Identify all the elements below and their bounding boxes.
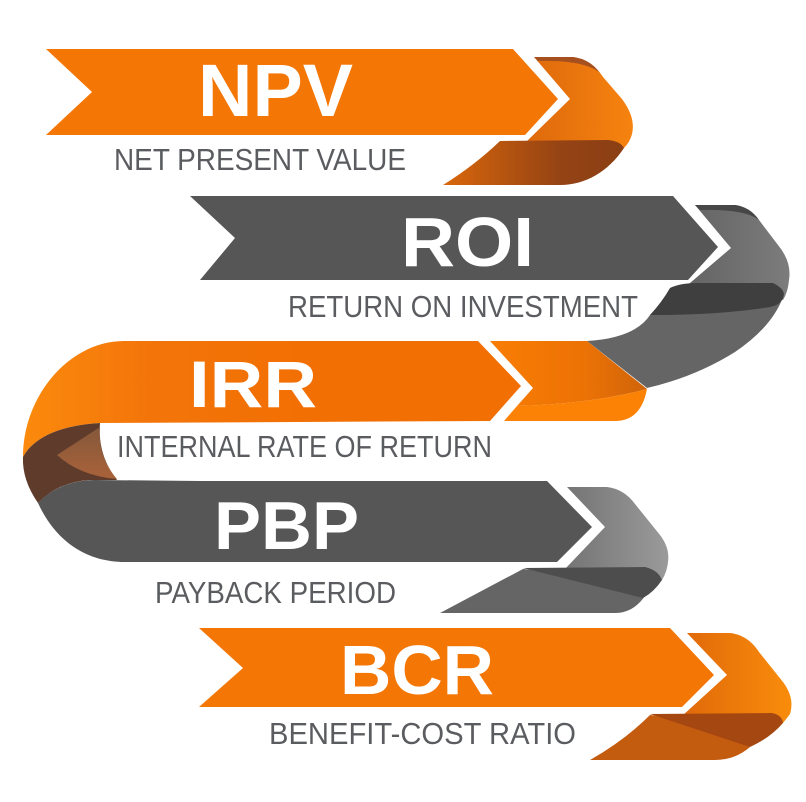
ribbon fold: ROI back bbox=[670, 205, 790, 300]
heading: BCR: BCR bbox=[340, 631, 494, 709]
label: benefit-cost ratio: BENEFIT-COST RATIO bbox=[269, 716, 576, 751]
arrow: NPV bbox=[46, 49, 558, 135]
ribbon fold: NPV top edge bbox=[534, 57, 600, 73]
ribbon fold: BCR lower bbox=[590, 715, 750, 760]
ribbon fold: IRR lower light bbox=[504, 389, 647, 421]
arrow: BCR bbox=[199, 628, 714, 707]
ribbon fold: PBP lower bbox=[440, 569, 645, 613]
ribbon fold: BCR back bbox=[682, 633, 791, 723]
arrow: ROI bbox=[190, 196, 718, 280]
heading: IRR: IRR bbox=[189, 347, 317, 421]
ribbon fold: ROI top edge bbox=[695, 205, 759, 220]
panel: ROI bbox=[190, 196, 790, 388]
ribbon fold: PBP shadow bbox=[523, 567, 662, 598]
label: payback period: PAYBACK PERIOD bbox=[155, 575, 396, 610]
arrow: IRR with loop bbox=[23, 341, 521, 457]
ribbon fold: ROI shadow bbox=[650, 283, 784, 315]
heading: PBP: PBP bbox=[214, 488, 359, 564]
ribbon fold: loop inner light bbox=[57, 427, 117, 479]
label: internal rate of return: INTERNAL RATE OF RETURN bbox=[117, 429, 492, 464]
ribbon fold: loop dark brown bbox=[23, 423, 117, 503]
arrow: PBP bbox=[120, 481, 592, 562]
heading: ROI: ROI bbox=[401, 203, 534, 281]
panel: PBP bbox=[120, 481, 668, 613]
ribbon fold: NPV back bbox=[527, 57, 633, 148]
panel: NPV bbox=[46, 49, 633, 185]
ribbon fold: loop grey lower bbox=[38, 480, 200, 562]
panel: BCR bbox=[199, 628, 791, 760]
panel: IRR with left loop bbox=[23, 341, 647, 564]
ribbon fold: IRR back bbox=[490, 341, 647, 406]
ribbon fold: PBP back bbox=[565, 487, 668, 580]
label: return on investment: RETURN ON INVESTMENT bbox=[288, 289, 638, 324]
ribbon fold: BCR shadow bbox=[650, 713, 783, 747]
heading: NPV: NPV bbox=[198, 49, 353, 132]
ribbon fold: ROI lower sweep bbox=[587, 295, 783, 388]
label: net present value: NET PRESENT VALUE bbox=[114, 142, 406, 177]
ribbon fold: NPV shadow bbox=[443, 140, 624, 185]
